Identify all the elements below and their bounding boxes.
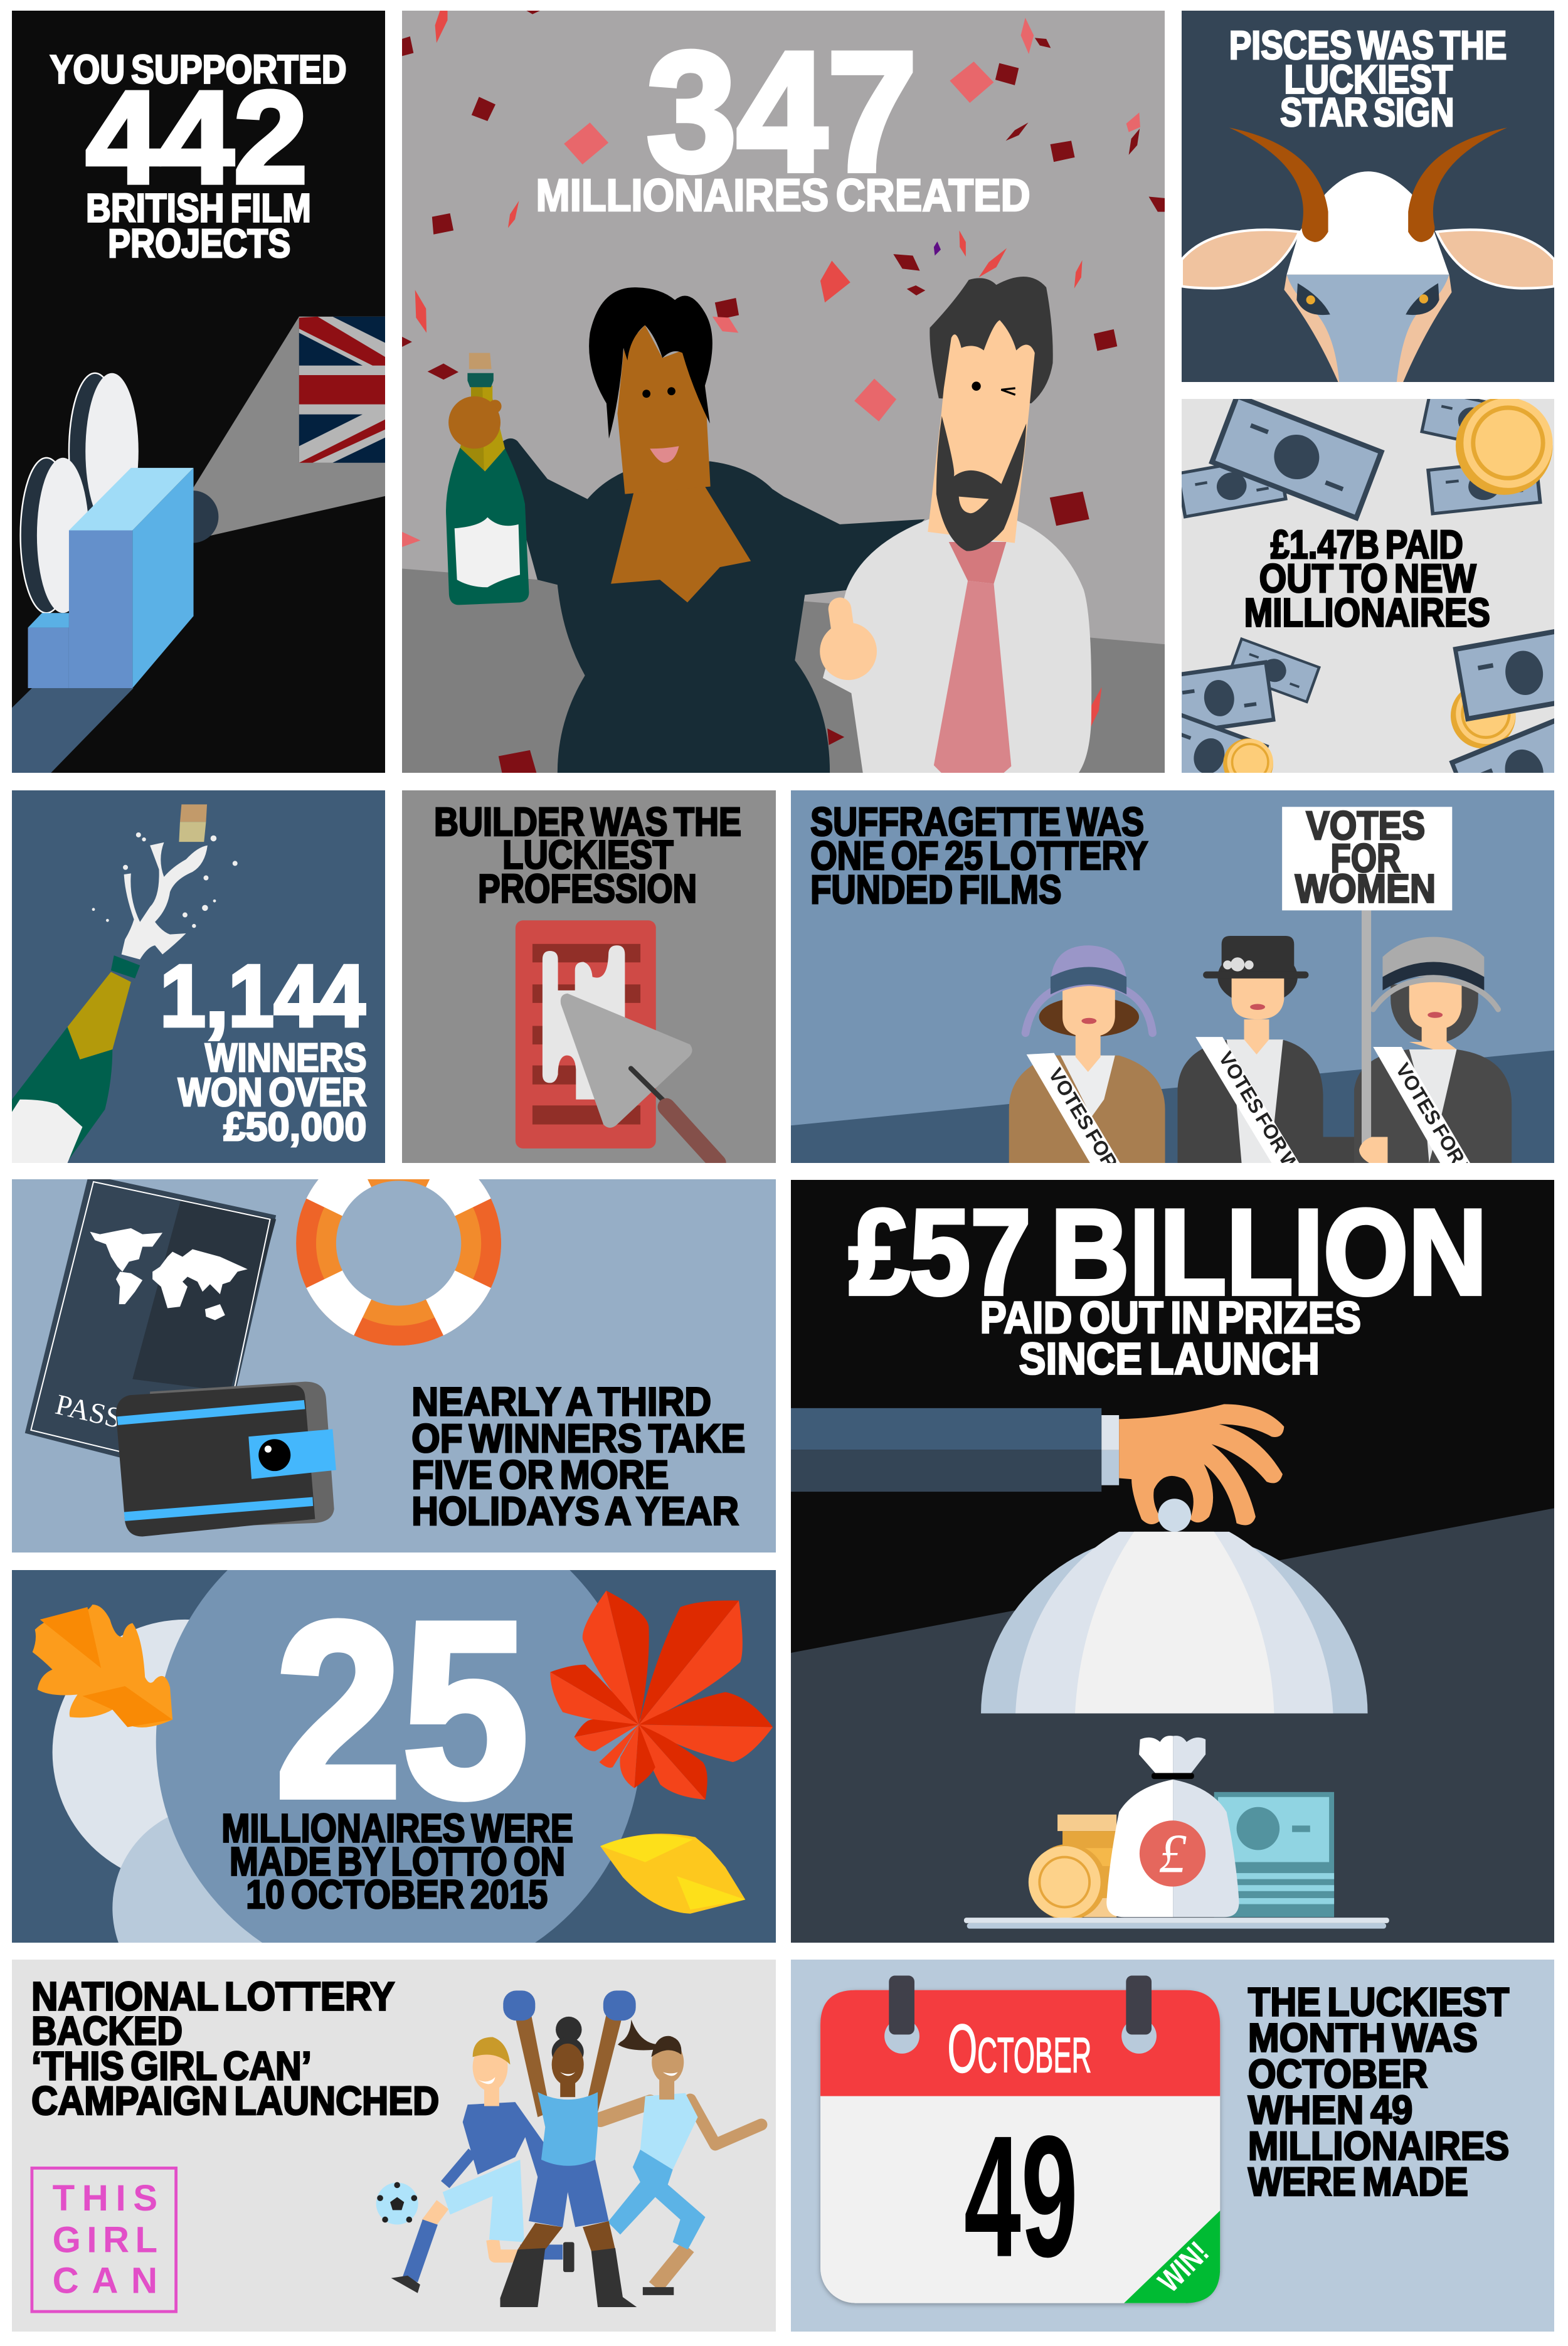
icon: calendar: OCTOBER <box>948 2010 1091 2087</box>
text: builder was the luckiest profession: PROFESSION <box>478 866 697 911</box>
heading: you supported 442: 442 <box>86 65 307 211</box>
text: 25 millionaires: 25 <box>275 1570 529 1849</box>
text: 25 millionaires <box>221 1570 573 1917</box>
character: woman with champagne <box>500 287 925 773</box>
icon: bricks and trowel <box>516 920 718 1163</box>
character: winking man with beard <box>820 277 1091 773</box>
confetti <box>402 11 1165 773</box>
logo: this girl can: THIS <box>53 2178 157 2219</box>
figure: suffragette middle <box>1177 936 1364 1227</box>
icon: money bag, coins and notes on tray <box>964 1736 1389 1929</box>
text: £1.47B paid out: OUT TO NEW <box>1259 556 1476 601</box>
panel: holidays <box>12 1179 776 1552</box>
projector beam <box>193 317 385 537</box>
text: nearly a third of winners: HOLIDAYS A YEAR <box>411 1489 739 1534</box>
text: campaign launched: BACKED <box>31 2009 183 2053</box>
text: the luckiest month: MONTH WAS <box>1248 2015 1478 2061</box>
heading: Pisces was the luckiest star sign: LUCKIEST <box>1284 57 1453 102</box>
text: 25 millionaires: 10 OCTOBER 2015 <box>246 1872 548 1917</box>
panel: £1.47B paid to new millionaires <box>1182 399 1554 773</box>
heading: 347 millionaires created: MILLIONAIRES CREATED <box>536 171 1030 221</box>
icon: banknotes and coins <box>1152 390 1568 828</box>
text: the luckiest month: MILLIONAIRES <box>1248 2123 1509 2168</box>
panel: builder luckiest profession <box>402 790 776 1163</box>
decorative circles <box>53 1500 641 2010</box>
figure: running girl <box>600 2020 761 2295</box>
icon: passport <box>25 1179 276 1458</box>
text: builder was the luckiest profession: LUCKIEST <box>502 832 674 877</box>
text: campaign launched: CAMPAIGN LAUNCHED <box>31 2078 439 2123</box>
icon: wallet <box>116 1382 336 1537</box>
text: nearly a third of winners: FIVE OR MORE <box>411 1452 669 1497</box>
icon: calendar: 49 <box>964 2100 1078 2293</box>
panel: £57 billion paid out <box>791 1180 1554 1943</box>
figure: suffragette right <box>1354 937 1512 1239</box>
heading: you supported 442: BRITISH FILM <box>86 185 311 231</box>
text: £1.47B paid out: MILLIONAIRES <box>1244 590 1490 635</box>
text: 25 millionaires: MADE BY LOTTO ON <box>230 1839 565 1884</box>
text: the luckiest month <box>1248 1979 1509 2204</box>
icon: votes for women placard: VOTES <box>1306 803 1425 848</box>
heading: Pisces was the luckiest star sign: STAR SIGN <box>1280 90 1454 135</box>
text: nearly a third of winners <box>411 1379 745 1534</box>
text: Suffragette was one of 25: ONE OF 25 LOTTERY <box>810 833 1148 878</box>
icon: champagne bottle <box>446 353 529 605</box>
figure: suffragette middle: VOTES FOR WOMEN <box>1214 1048 1335 1227</box>
logo: this girl can: GIRL <box>53 2219 157 2260</box>
heading: 347 millionaires created <box>536 17 1030 221</box>
icon: cloche dome <box>981 1532 1368 1714</box>
text: £1.47B paid out <box>1244 522 1490 635</box>
heading: 347 millionaires created: 347 <box>647 17 918 207</box>
heading: you supported 442: YOU SUPPORTED <box>50 46 347 92</box>
icon: red chestnut leaf <box>550 1591 773 1800</box>
logo: this girl can: CAN <box>53 2261 157 2301</box>
text: campaign launched: ‘THIS GIRL CAN’ <box>31 2043 312 2088</box>
text: the luckiest month: OCTOBER <box>1248 2051 1428 2096</box>
panel: 1,144 winners <box>12 790 385 1163</box>
heading: £57 billion: SINCE LAUNCH <box>1019 1334 1320 1384</box>
panel: Pisces luckiest star sign <box>1182 11 1554 382</box>
heading: £57 billion: £57 BILLION <box>849 1185 1487 1320</box>
text: 1,144 winners won over £50,000: £50,000 <box>223 1104 366 1149</box>
logo: this girl can <box>32 2168 176 2312</box>
heading: Pisces was the luckiest star sign <box>1229 23 1507 135</box>
figure: suffragette left: VOTES FOR WOMEN <box>1044 1064 1165 1244</box>
heading: Pisces was the luckiest star sign: PISCES WAS THE <box>1229 23 1507 68</box>
icon: money bag, coins and notes on tray: £ <box>1159 1823 1187 1884</box>
text: nearly a third of winners: NEARLY A THIRD <box>411 1379 711 1425</box>
icon: union flag <box>299 317 385 463</box>
panel: 347 millionaires created <box>402 11 1165 773</box>
panel: This Girl Can <box>12 1960 776 2332</box>
figure: suffragette left <box>1009 945 1165 1244</box>
icon: calendar: WIN! <box>1152 2235 1216 2299</box>
text: Suffragette was one of 25: SUFFRAGETTE WAS <box>810 799 1144 844</box>
figure: cheering girl <box>500 1990 637 2307</box>
panel: 442 British film projects <box>12 11 385 773</box>
text: 25 millionaires: MILLIONAIRES WERE <box>221 1806 573 1851</box>
text: the luckiest month: WERE MADE <box>1248 2159 1468 2204</box>
panel: luckiest month October <box>791 1960 1554 2332</box>
text: 1,144 winners won over £50,000 <box>160 947 366 1149</box>
text: Suffragette was one of 25 <box>810 799 1148 912</box>
icon: orange oak leaf <box>33 1605 172 1728</box>
icon: passport: PASS <box>53 1388 125 1434</box>
text: the luckiest month: THE LUCKIEST <box>1248 1979 1509 2024</box>
heading: you supported 442 <box>50 46 347 266</box>
text: campaign launched: NATIONAL LOTTERY <box>31 1974 395 2019</box>
icon: yellow leaf <box>600 1834 745 1914</box>
heading: £57 billion: PAID OUT IN PRIZES <box>980 1293 1361 1343</box>
icon: popping champagne bottle <box>12 804 238 1163</box>
text: £1.47B paid out: £1.47B PAID <box>1271 522 1463 567</box>
heading: £57 billion <box>849 1185 1487 1384</box>
heading: you supported 442: PROJECTS <box>108 221 290 266</box>
panel: Suffragette lottery funded film <box>791 790 1554 1244</box>
text: nearly a third of winners: OF WINNERS TAKE <box>411 1416 745 1461</box>
icon: hand lifting cloche <box>791 1404 1284 1532</box>
icon: calendar <box>820 1976 1220 2303</box>
figure: footballer girl <box>376 2037 575 2293</box>
icon: votes for women placard: WOMEN <box>1295 866 1436 911</box>
icon: votes for women placard <box>1282 803 1452 1163</box>
text: Suffragette was one of 25: FUNDED FILMS <box>810 867 1061 912</box>
icon: lifebuoy <box>296 1179 501 1346</box>
panel: 25 millionaires on 10 October 2015 <box>12 1570 776 1943</box>
text: 1,144 winners won over £50,000: 1,144 <box>160 947 365 1045</box>
icon: bull head <box>1182 127 1554 382</box>
text: the luckiest month: WHEN 49 <box>1248 2087 1412 2132</box>
icon: film projector <box>12 373 218 773</box>
icon: votes for women placard: FOR <box>1331 836 1401 881</box>
text: builder was the luckiest profession <box>434 799 741 911</box>
figure: suffragette right: VOTES FOR WOMEN <box>1391 1059 1512 1239</box>
text: campaign launched <box>31 1974 439 2123</box>
